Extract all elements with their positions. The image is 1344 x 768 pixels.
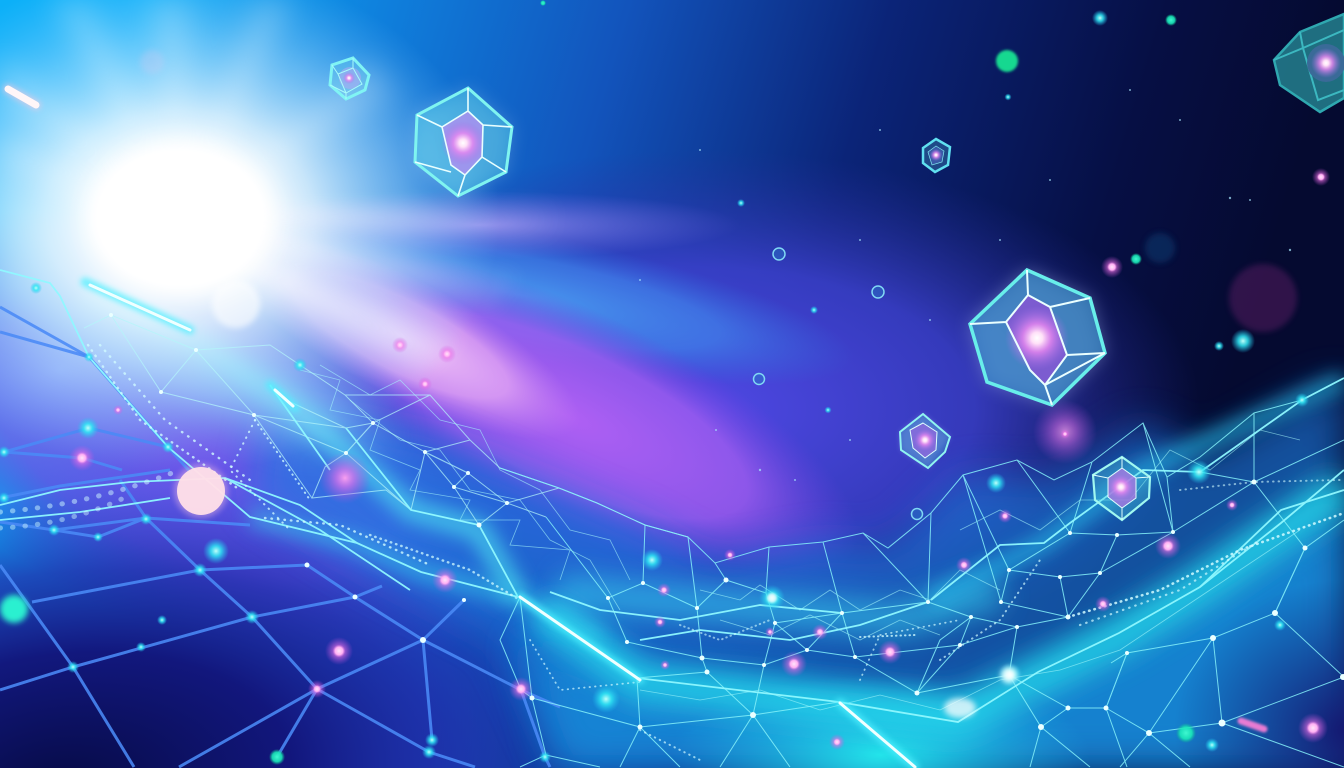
- pink particles: [69, 168, 1330, 750]
- small floating rings: [754, 248, 922, 520]
- crystal: on the ridge right: [1093, 457, 1150, 520]
- fine star dust: [639, 89, 1291, 481]
- crystal: largest right: [970, 270, 1105, 405]
- mesh nodes: [109, 313, 1344, 736]
- white hot spots on the ridge: [767, 593, 1017, 718]
- upper fine mesh: [84, 315, 688, 537]
- crystal: small upper right: [923, 139, 950, 172]
- crystal: large top centre: [415, 88, 512, 196]
- crystal: lower middle right: [900, 414, 950, 468]
- bright ridge lines: [0, 270, 1344, 722]
- large glowing orbs: [0, 50, 1297, 623]
- green particles: [269, 0, 1196, 765]
- crystal: cropped top right: [1274, 14, 1344, 112]
- dotted particle streams: [0, 345, 1344, 760]
- crystal: small top left: [330, 58, 369, 99]
- central and right fine mesh: [500, 400, 1344, 767]
- lower-left grid network: [0, 307, 560, 767]
- dense web along the ridge: [300, 365, 1300, 710]
